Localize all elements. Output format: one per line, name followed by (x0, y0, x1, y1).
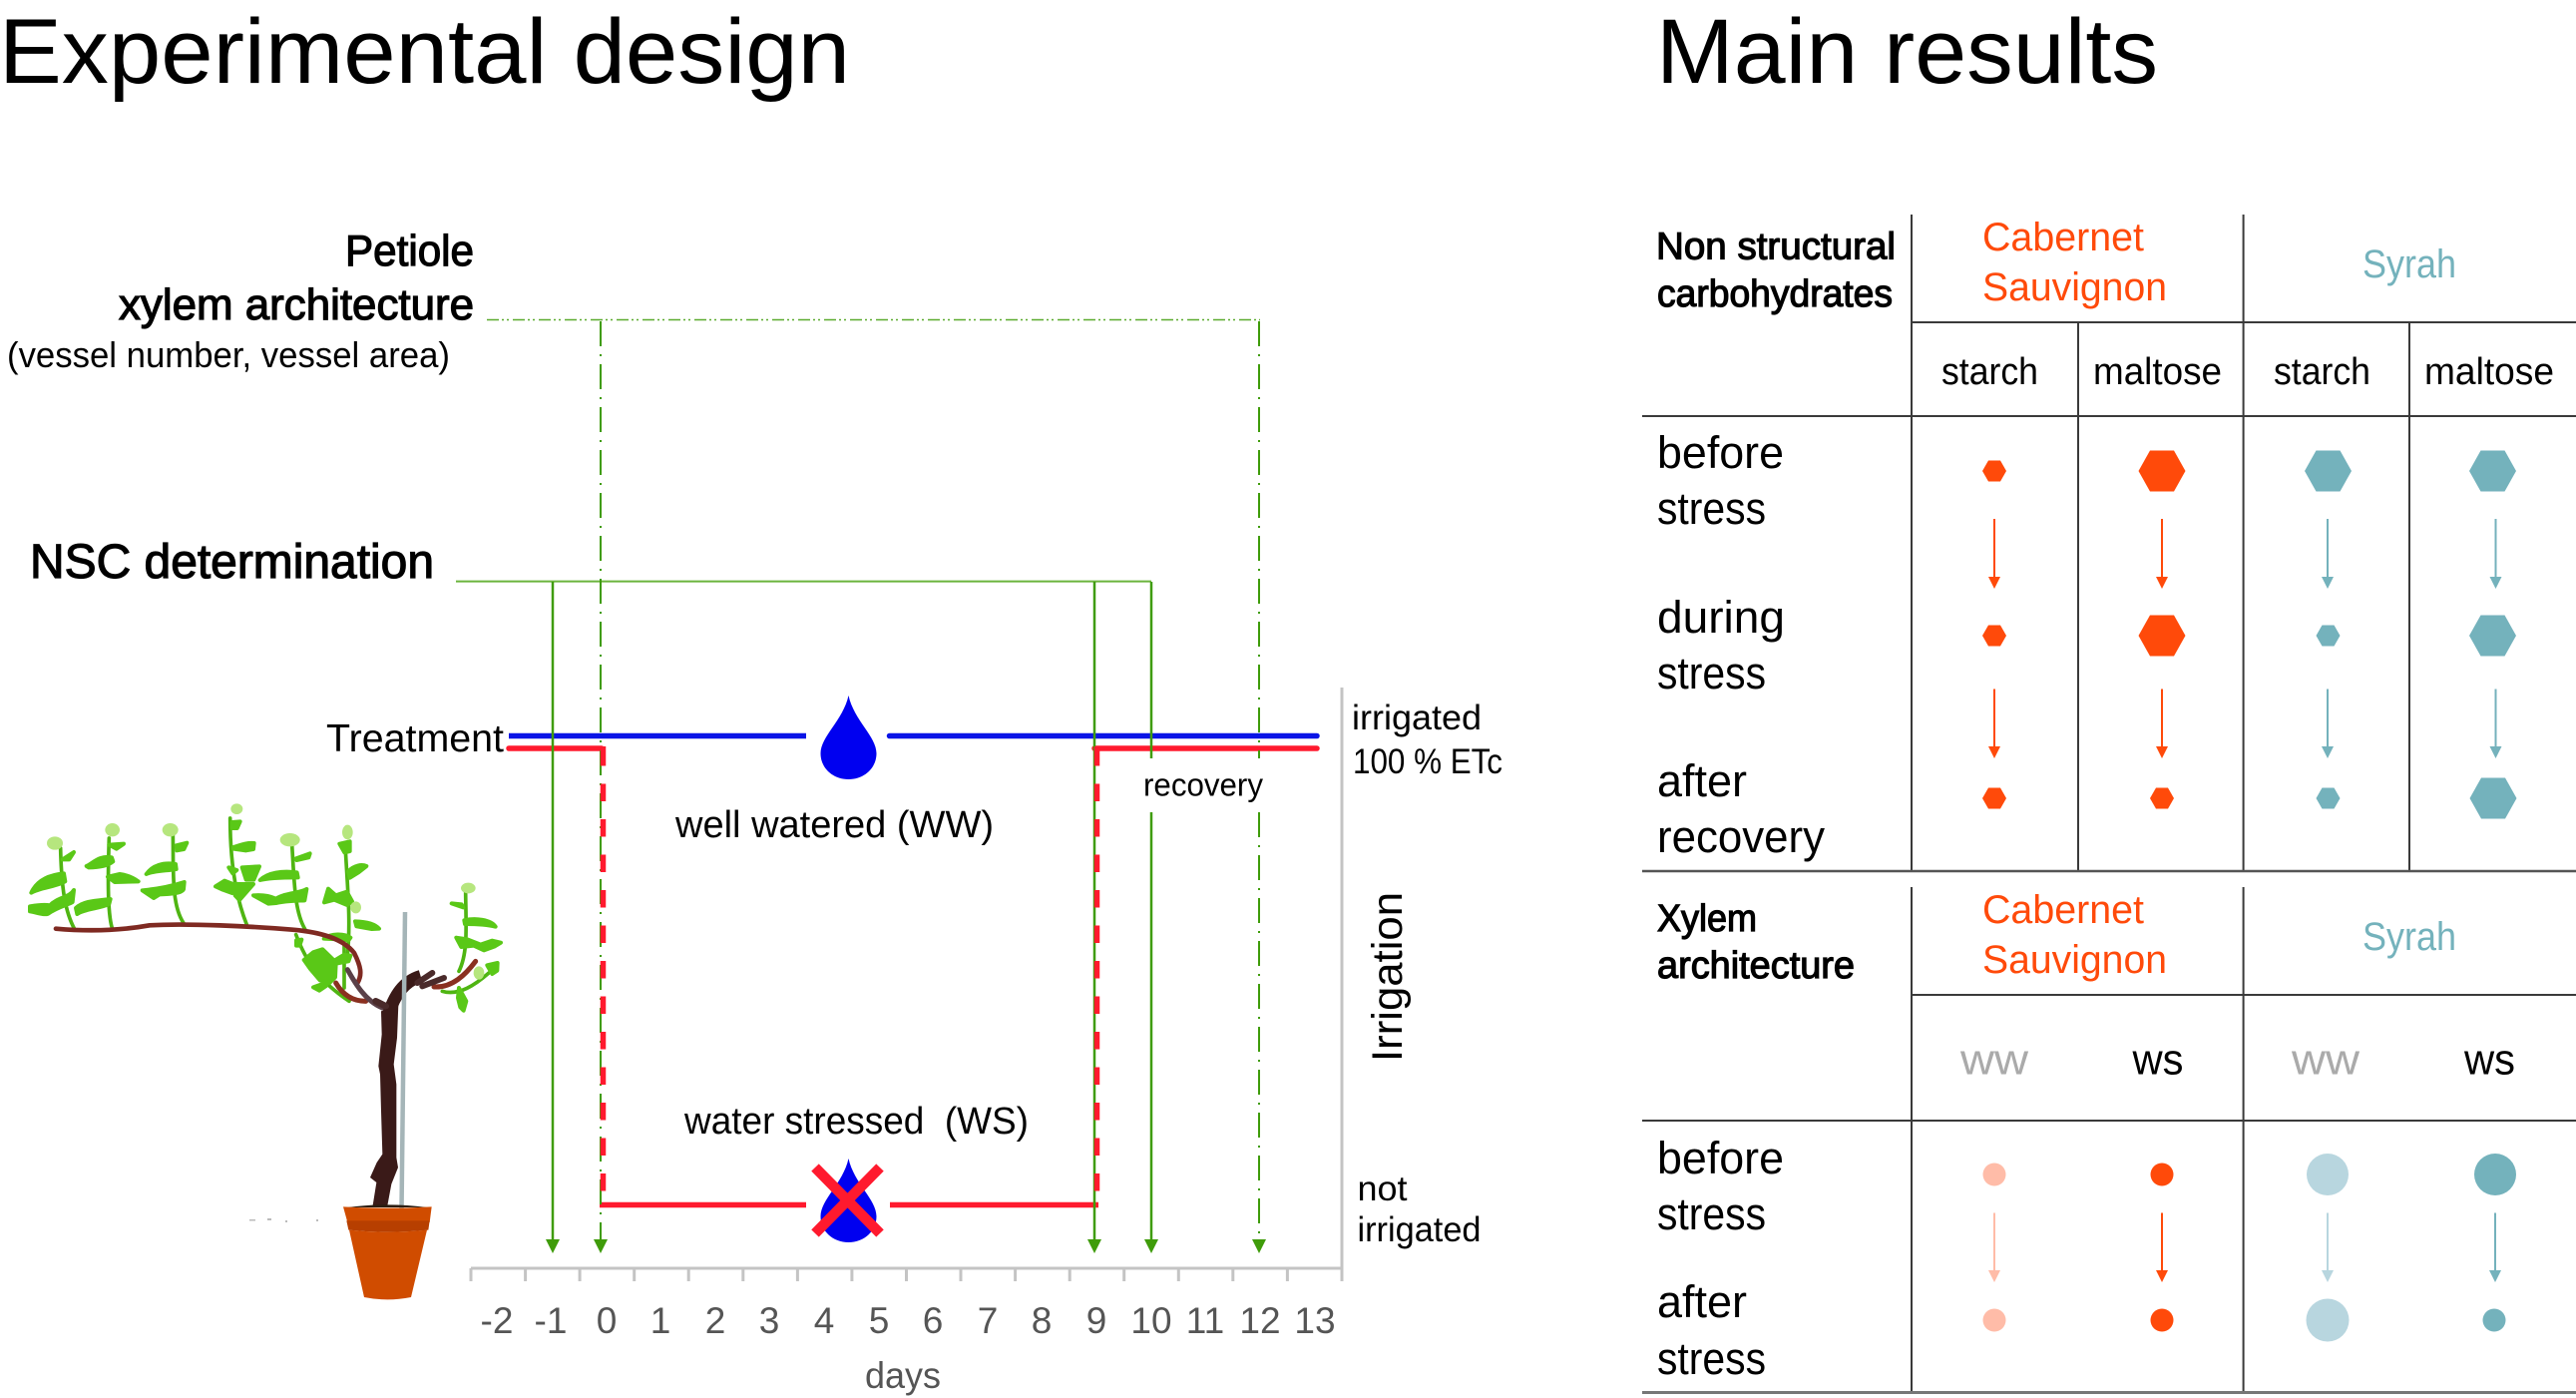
axis: days: -1 (535, 1300, 567, 1341)
heading: non structural carbohydrates (1656, 226, 1896, 315)
sub headers: ww and ws (1959, 1036, 2515, 1084)
axis: days: 3 (759, 1300, 779, 1341)
label: irrigated 100% ETc (1352, 699, 1503, 781)
sub headers: ww and ws: ws (2132, 1036, 2183, 1084)
arrow: NSC day -1 (546, 582, 560, 1253)
row labels: before (1657, 427, 1784, 478)
shoot 1 leaves (31, 873, 65, 893)
sub headers: ww and ws: ws (2463, 1036, 2515, 1084)
shoot 4 leaves (233, 843, 254, 850)
shoot 5 leaves (260, 872, 298, 880)
header: syrah: Syrah (2362, 915, 2456, 959)
panel: xylem architecture table (1642, 887, 2576, 1393)
axis: days: 2 (705, 1300, 725, 1341)
label: not irrigated (1357, 1169, 1481, 1249)
row labels: stress (1657, 483, 1766, 534)
axis: days: 11 (1186, 1300, 1224, 1341)
heading: non structural carbohydrates: Non structural (1656, 226, 1896, 267)
arrow: NSC day 9 (1087, 582, 1101, 1253)
title: Experimental design: Experimental design (0, 1, 850, 103)
heading: xylem architecture: architecture (1657, 945, 1855, 987)
low cluster leaves (304, 949, 350, 983)
panel: non structural carbohydrates table (1642, 215, 2576, 871)
label: not irrigated: irrigated (1357, 1210, 1481, 1249)
header: cabernet sauvignon (1982, 216, 2167, 309)
arrow: NSC day 10 (1144, 582, 1158, 1253)
axis: days: 0 (597, 1300, 617, 1341)
row labels: stress (1657, 1333, 1766, 1384)
label: recovery: recovery (1143, 766, 1263, 802)
right shoot leaves (464, 919, 496, 927)
title: Main results: Main results (1656, 1, 2158, 103)
shoot 2 leaves (87, 857, 113, 867)
label: irrigation axis: Irrigation (1364, 892, 1412, 1062)
axis: days: 5 (869, 1300, 889, 1341)
shoot tips (47, 836, 63, 850)
hexagon markers cabernet (1982, 451, 2185, 808)
header: cabernet sauvignon: Sauvignon (1982, 265, 2167, 309)
row labels: after (1657, 755, 1747, 806)
shoot 3 leaves (147, 863, 177, 874)
line: petiole sampling horizontal (487, 319, 1260, 321)
vine stake (401, 912, 405, 1209)
sub headers: starch and maltose: starch (2274, 351, 2370, 393)
icon: water drop (820, 696, 876, 779)
header: syrah: Syrah (2362, 242, 2456, 286)
row labels: after (1657, 1276, 1747, 1327)
table grid (1642, 215, 2576, 871)
row labels: stress (1657, 1188, 1766, 1239)
heading: xylem architecture (1657, 898, 1855, 987)
label: irrigated 100% ETc: irrigated (1352, 699, 1482, 737)
sub headers: ww and ws: ww (1959, 1036, 2028, 1084)
row labels: before (1657, 1133, 1784, 1183)
axis: days: 6 (923, 1300, 943, 1341)
axis: days: 12 (1239, 1300, 1281, 1341)
axis: days: 8 (1032, 1300, 1052, 1341)
header: cabernet sauvignon: Cabernet (1982, 216, 2144, 259)
header: cabernet sauvignon: Sauvignon (1982, 938, 2167, 982)
heading: xylem architecture: Xylem (1657, 898, 1757, 940)
row labels: during (1657, 592, 1785, 643)
label: petiole xylem architecture: (vessel number, vessel area) (7, 334, 450, 375)
row labels: recovery (1657, 811, 1825, 862)
label: NSC determination: NSC determination (30, 536, 434, 589)
sub headers: starch and maltose: maltose (2093, 351, 2222, 393)
label: irrigated 100% ETc: 100 % ETc (1353, 742, 1503, 781)
row labels (1657, 427, 1825, 862)
sub headers: starch and maltose: maltose (2424, 351, 2554, 393)
sub headers: starch and maltose (1941, 351, 2554, 393)
axis: days: days (865, 1355, 941, 1396)
label: petiole xylem architecture (7, 227, 474, 375)
vine canes and shoots (30, 803, 501, 1018)
arrow: petiole day 12 (1252, 321, 1266, 1253)
label: well watered: well watered (WW) (674, 804, 994, 846)
axis: days: 9 (1086, 1300, 1106, 1341)
icon: potted grapevine (30, 803, 501, 1299)
sub headers: starch and maltose: starch (1941, 351, 2038, 393)
row labels (1657, 1133, 1784, 1384)
axis: days (471, 688, 1342, 1396)
heading: non structural carbohydrates: carbohydrates (1657, 273, 1893, 315)
line: NSC sampling horizontal (456, 581, 1151, 583)
label: not irrigated: not (1357, 1169, 1408, 1208)
panel: experimental design timeline (7, 227, 1503, 1396)
axis: days: 7 (978, 1300, 998, 1341)
arrow: petiole day 0 (594, 321, 608, 1253)
row labels: stress (1657, 648, 1766, 699)
arrows cabernet (1988, 519, 2168, 758)
axis: days: 1 (650, 1300, 670, 1341)
label: petiole xylem architecture: Petiole (345, 227, 474, 275)
line: red treatment horizontals (509, 748, 1317, 1205)
label: treatment: Treatment (326, 717, 504, 760)
axis: days: 10 (1130, 1300, 1172, 1341)
label: water stressed: water stressed (WS) (683, 1101, 1029, 1143)
trunk and pot (343, 1005, 432, 1299)
line: red dashed treatment transitions (603, 746, 1097, 1204)
arrows (1988, 1213, 2501, 1282)
icon: crossed water drop (815, 1159, 880, 1242)
header: cabernet sauvignon (1982, 888, 2167, 982)
soil speckles (249, 1218, 318, 1222)
sub headers: ww and ws: ww (2291, 1036, 2360, 1084)
header: cabernet sauvignon: Cabernet (1982, 888, 2144, 932)
label: petiole xylem architecture: xylem architecture (119, 280, 474, 329)
line: well watered blue treatment line (509, 733, 1317, 738)
arrows syrah (2322, 519, 2502, 758)
axis: days: 13 (1294, 1300, 1336, 1341)
hexagon markers syrah (2305, 451, 2516, 818)
table grid (1642, 887, 2576, 1392)
shoot 6 leaves (339, 841, 350, 852)
circle markers (1983, 1154, 2516, 1341)
axis: days: -2 (481, 1300, 513, 1341)
axis: days: 4 (814, 1300, 834, 1341)
